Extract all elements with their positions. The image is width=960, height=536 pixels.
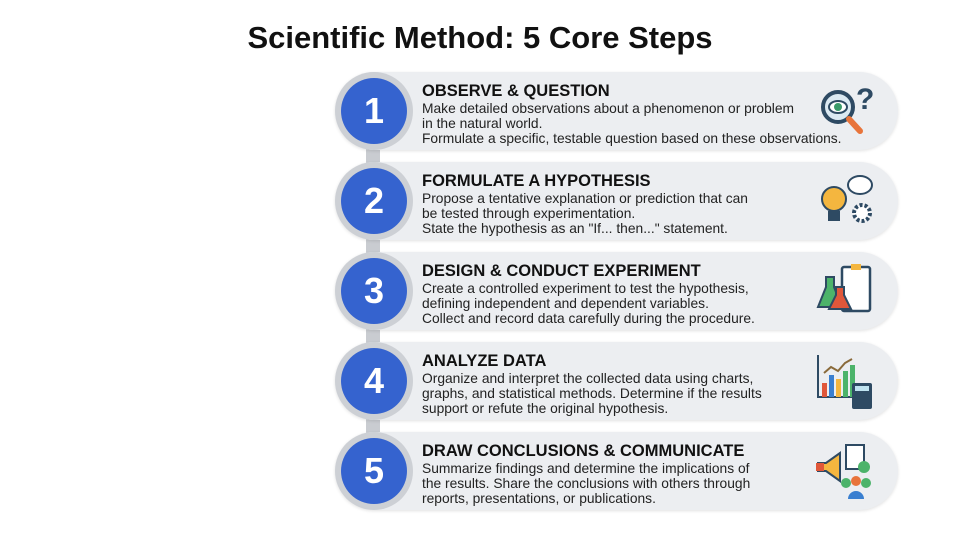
panel: step 2: 2 (364, 180, 384, 221)
panel: step 3: 3 (364, 270, 384, 311)
text: step 3: defining independent and dependent variables. (422, 296, 709, 311)
panel: step 5 (335, 432, 898, 510)
text: step 3 (422, 262, 755, 326)
text: step 5: reports, presentations, or publications. (422, 491, 656, 506)
text: step 1 (422, 82, 842, 146)
panel: step 1: 1 (364, 90, 384, 131)
text: step 1: OBSERVE & QUESTION (422, 82, 610, 100)
text: step 4: Organize and interpret the collected data using charts, (422, 371, 753, 386)
text: step 4: graphs, and statistical methods. Determine if the results (422, 386, 762, 401)
icon: magnifier: ? (856, 83, 874, 116)
text: step 5: Summarize findings and determine the implications of (422, 461, 749, 476)
text: step 5: the results. Share the conclusions with others through (422, 476, 750, 491)
text: step 2 (422, 172, 748, 236)
icon: chart and calculator (817, 355, 872, 409)
title: Scientific Method: 5 Core Steps (247, 20, 713, 55)
panel: step 1 (335, 72, 898, 150)
icon: lightbulb (821, 175, 873, 223)
text: step 4: ANALYZE DATA (422, 352, 546, 370)
text: step 2: State the hypothesis as an "If... then..." statement. (422, 221, 728, 236)
text: step 5 (422, 442, 750, 506)
text: step 1: in the natural world. (422, 116, 542, 131)
panel: step 4 (335, 342, 898, 420)
panel: step 4: 4 (364, 360, 384, 401)
text: step 1: Formulate a specific, testable question based on these observations. (422, 131, 842, 146)
text: step 1: Make detailed observations about a phenomenon or problem (422, 101, 794, 116)
panel: step 3 (335, 252, 898, 330)
text: step 5: DRAW CONCLUSIONS & COMMUNICATE (422, 442, 744, 460)
text: step 3: Collect and record data carefully during the procedure. (422, 311, 755, 326)
text: step 2: be tested through experimentation. (422, 206, 635, 221)
text: step 3: Create a controlled experiment to test the hypothesis, (422, 281, 749, 296)
icon: megaphone and people (816, 444, 871, 499)
text: step 4: support or refute the original hypothesis. (422, 401, 668, 416)
icon: magnifier (821, 83, 874, 134)
panel: step 5: 5 (364, 450, 384, 491)
panel: step 2 (335, 162, 898, 240)
text: step 2: Propose a tentative explanation or prediction that can (422, 191, 748, 206)
text: step 4 (422, 352, 762, 416)
text: step 2: FORMULATE A HYPOTHESIS (422, 172, 651, 190)
text: step 3: DESIGN & CONDUCT EXPERIMENT (422, 262, 701, 280)
icon: lab flasks (816, 264, 872, 312)
